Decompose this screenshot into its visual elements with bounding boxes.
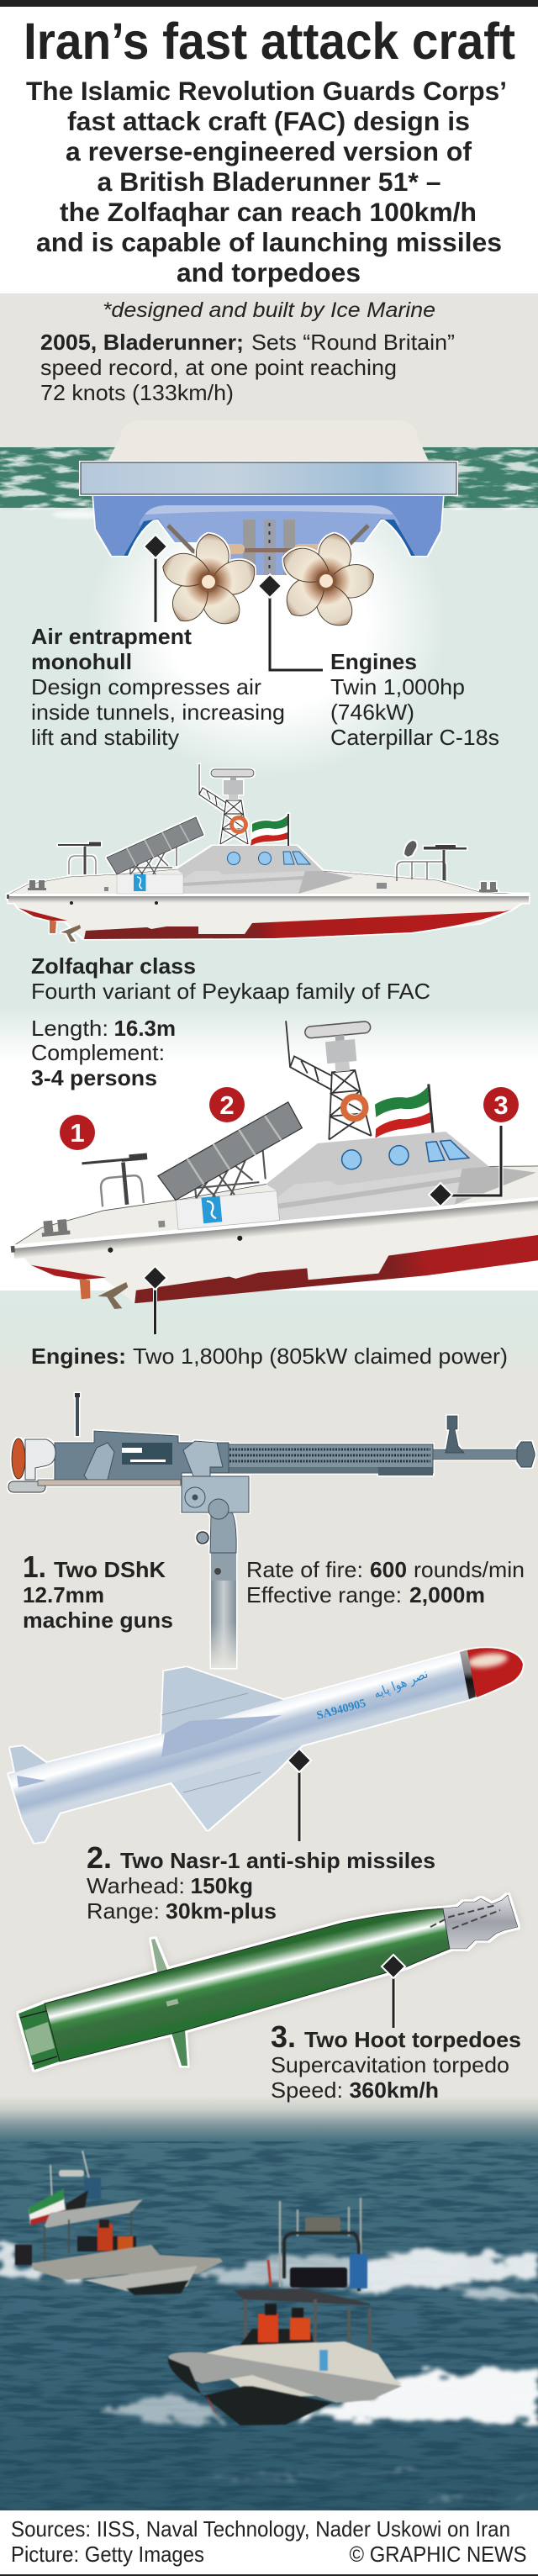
callout pointer: engines [258, 574, 323, 670]
text: specs: Length: [31, 1016, 108, 1041]
text: rate of fire and range: Rate of fire: [246, 1557, 363, 1582]
receiver [55, 1431, 229, 1484]
callout pointer: engines on hull [143, 1266, 166, 1334]
text: rate of fire and range [246, 1557, 525, 1607]
text: rate of fire and range: rounds/min [414, 1557, 525, 1582]
DShK machine gun [8, 1393, 535, 1668]
text: missiles: 30km-plus [166, 1898, 277, 1924]
text: engines: Engines [330, 649, 417, 674]
missile markings: SA940905 [315, 1697, 367, 1723]
text: torpedoes: Supercavitation torpedo [271, 2052, 509, 2077]
text: specs: Complement: [31, 1040, 165, 1065]
text: Zolfaqhar class: Fourth variant of Peykaap family of FAC [31, 979, 430, 1004]
photo: patrol boats at sea [0, 2096, 538, 2510]
text: engines claimed power: Two 1,800hp (805kW claimed power) [133, 1343, 508, 1369]
footer [0, 2510, 538, 2576]
text: machine guns: Two DShK [54, 1557, 166, 1582]
text: torpedoes: 3. [271, 2019, 296, 2054]
intro text [26, 76, 507, 288]
propellers [159, 525, 386, 640]
water band [0, 447, 538, 519]
mount post [211, 1553, 236, 1667]
text: specs: 3-4 persons [31, 1065, 157, 1090]
hull [81, 462, 456, 575]
title: Iran’s fast attack craft [24, 13, 515, 70]
text: air entrapment monohull: lift and stability [31, 725, 179, 750]
intro text: the Zolfaqhar can reach 100km/h [60, 197, 477, 227]
text: missiles [87, 1840, 435, 1924]
text: engines: (746kW) [330, 699, 414, 725]
bladerunner record text: speed record, at one point reaching [40, 355, 397, 380]
text: missiles: Range: [87, 1898, 160, 1924]
text: machine guns: machine guns [23, 1607, 173, 1633]
top bar [0, 0, 538, 7]
text: torpedoes [271, 2019, 521, 2103]
text: machine guns [23, 1549, 173, 1633]
callout pointer: missile [287, 1749, 311, 1841]
text: missiles: Warhead: [87, 1873, 185, 1898]
intro text: fast attack craft (FAC) design is [67, 106, 470, 136]
large side view: Zolfaqhar [0, 975, 538, 1318]
text: torpedoes: Speed: [271, 2077, 343, 2103]
text: engines claimed power: Engines: [31, 1343, 126, 1369]
Hoot torpedo [18, 1895, 518, 2070]
bladerunner record text: 2005, Bladerunner; [40, 330, 244, 355]
callout pointer: air entrapment [144, 535, 167, 622]
bladerunner record text: 72 knots (133km/h) [40, 380, 234, 405]
Nasr-1 missile [8, 1648, 523, 1843]
text: engines [330, 649, 499, 750]
footnote: *designed and built by Ice Marine [103, 298, 435, 322]
text: missiles: 150kg [190, 1873, 253, 1898]
intro text: The Islamic Revolution Guards Corps’ [26, 76, 507, 106]
rear boat [15, 2151, 223, 2295]
bladerunner stern view [81, 420, 456, 640]
text: Zolfaqhar class [31, 953, 430, 1004]
intro text: and is capable of launching missiles [36, 227, 502, 257]
text: rate of fire and range: Effective range: [246, 1582, 402, 1607]
wakes [0, 2236, 538, 2499]
text: engines: Caterpillar C-18s [330, 725, 499, 750]
text: missiles: Two Nasr-1 anti-ship missiles [120, 1848, 435, 1873]
footer: © GRAPHIC NEWS [350, 2542, 526, 2567]
callout pointer: torpedo [382, 1955, 405, 2028]
barrel [229, 1444, 433, 1473]
callout pointer: torpedo tube [429, 1126, 501, 1206]
intro text: a reverse-engineered version of [66, 136, 472, 166]
text: air entrapment monohull: monohull [31, 649, 132, 674]
text: rate of fire and range: 2,000m [409, 1582, 485, 1607]
text: air entrapment monohull: inside tunnels, increasing [31, 699, 285, 725]
bladerunner record text: Sets “Round Britain” [251, 330, 455, 355]
number badge 3 [483, 1087, 519, 1122]
text: machine guns: 1. [23, 1549, 46, 1584]
small side view: Zolfaqhar [7, 764, 529, 942]
text: air entrapment monohull: Air entrapment [31, 624, 192, 649]
number badge 1 [60, 1115, 95, 1150]
Nasr-1 missile: نصر هوا پایه [372, 1666, 430, 1702]
text: engines: Twin 1,000hp [330, 674, 465, 699]
text: specs [31, 1016, 176, 1090]
text: rate of fire and range: 600 [370, 1557, 407, 1582]
text: machine guns: 12.7mm [23, 1582, 104, 1607]
upper deck [106, 420, 430, 465]
text: torpedoes: Two Hoot torpedoes [304, 2027, 521, 2052]
front boat [168, 2198, 402, 2426]
footer: Picture: Getty Images [11, 2542, 204, 2567]
footer: Sources: IISS, Naval Technology, Nader Uskowi on Iran [11, 2516, 510, 2542]
text: air entrapment monohull: Design compresses air [31, 674, 261, 699]
intro text: a British Bladerunner 51* – [98, 166, 440, 197]
text: Zolfaqhar class: Zolfaqhar class [31, 953, 196, 979]
intro text: and torpedoes [177, 257, 361, 288]
number badge 3: 3 [493, 1090, 509, 1120]
text: missiles: 2. [87, 1840, 112, 1875]
engine mounts [168, 520, 368, 577]
text: specs: 16.3m [114, 1016, 176, 1041]
bladerunner record text [40, 330, 455, 405]
grip [25, 1439, 55, 1480]
number badge 1: 1 [70, 1118, 85, 1148]
number badge 2: 2 [219, 1090, 235, 1120]
text: air entrapment monohull [31, 624, 285, 750]
text: torpedoes: 360km/h [350, 2077, 439, 2103]
number badge 2 [209, 1087, 245, 1122]
